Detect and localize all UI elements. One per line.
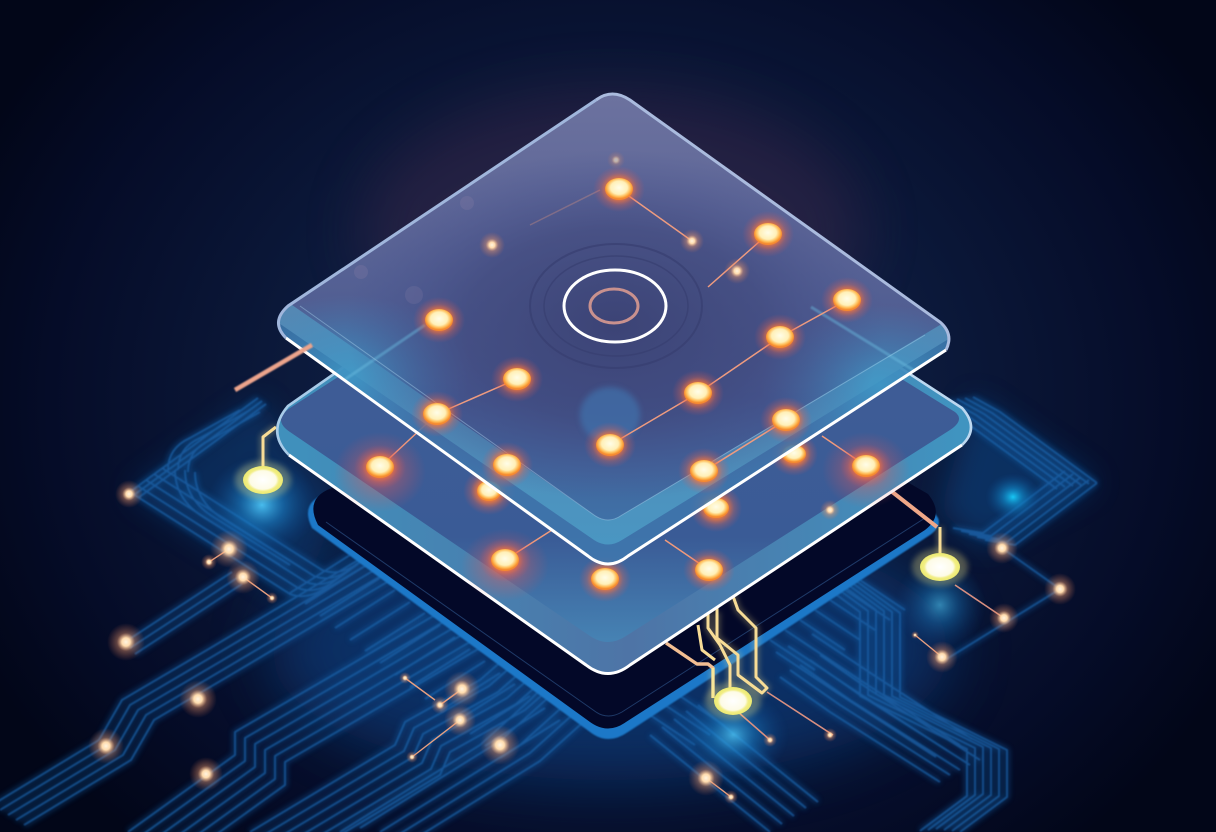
connector traces [263,427,1004,740]
circuit traces [0,397,1097,832]
pad: left [235,461,291,499]
board lights: lines [209,549,942,797]
chip base [308,300,939,739]
nodes: lower plate [334,414,910,602]
pad: bottom [705,682,761,720]
trace lines: upper plate [235,189,847,471]
board lights [88,480,1076,804]
target rings [530,244,702,368]
layer: upper glass plate [276,92,950,566]
nodes: upper plate [354,151,873,494]
warm halo behind top plate [362,90,862,370]
layer: lower glass plate [277,180,971,674]
blue glow spots [206,455,1041,781]
pad: right [912,548,968,586]
board glow beneath chip [130,397,1097,780]
